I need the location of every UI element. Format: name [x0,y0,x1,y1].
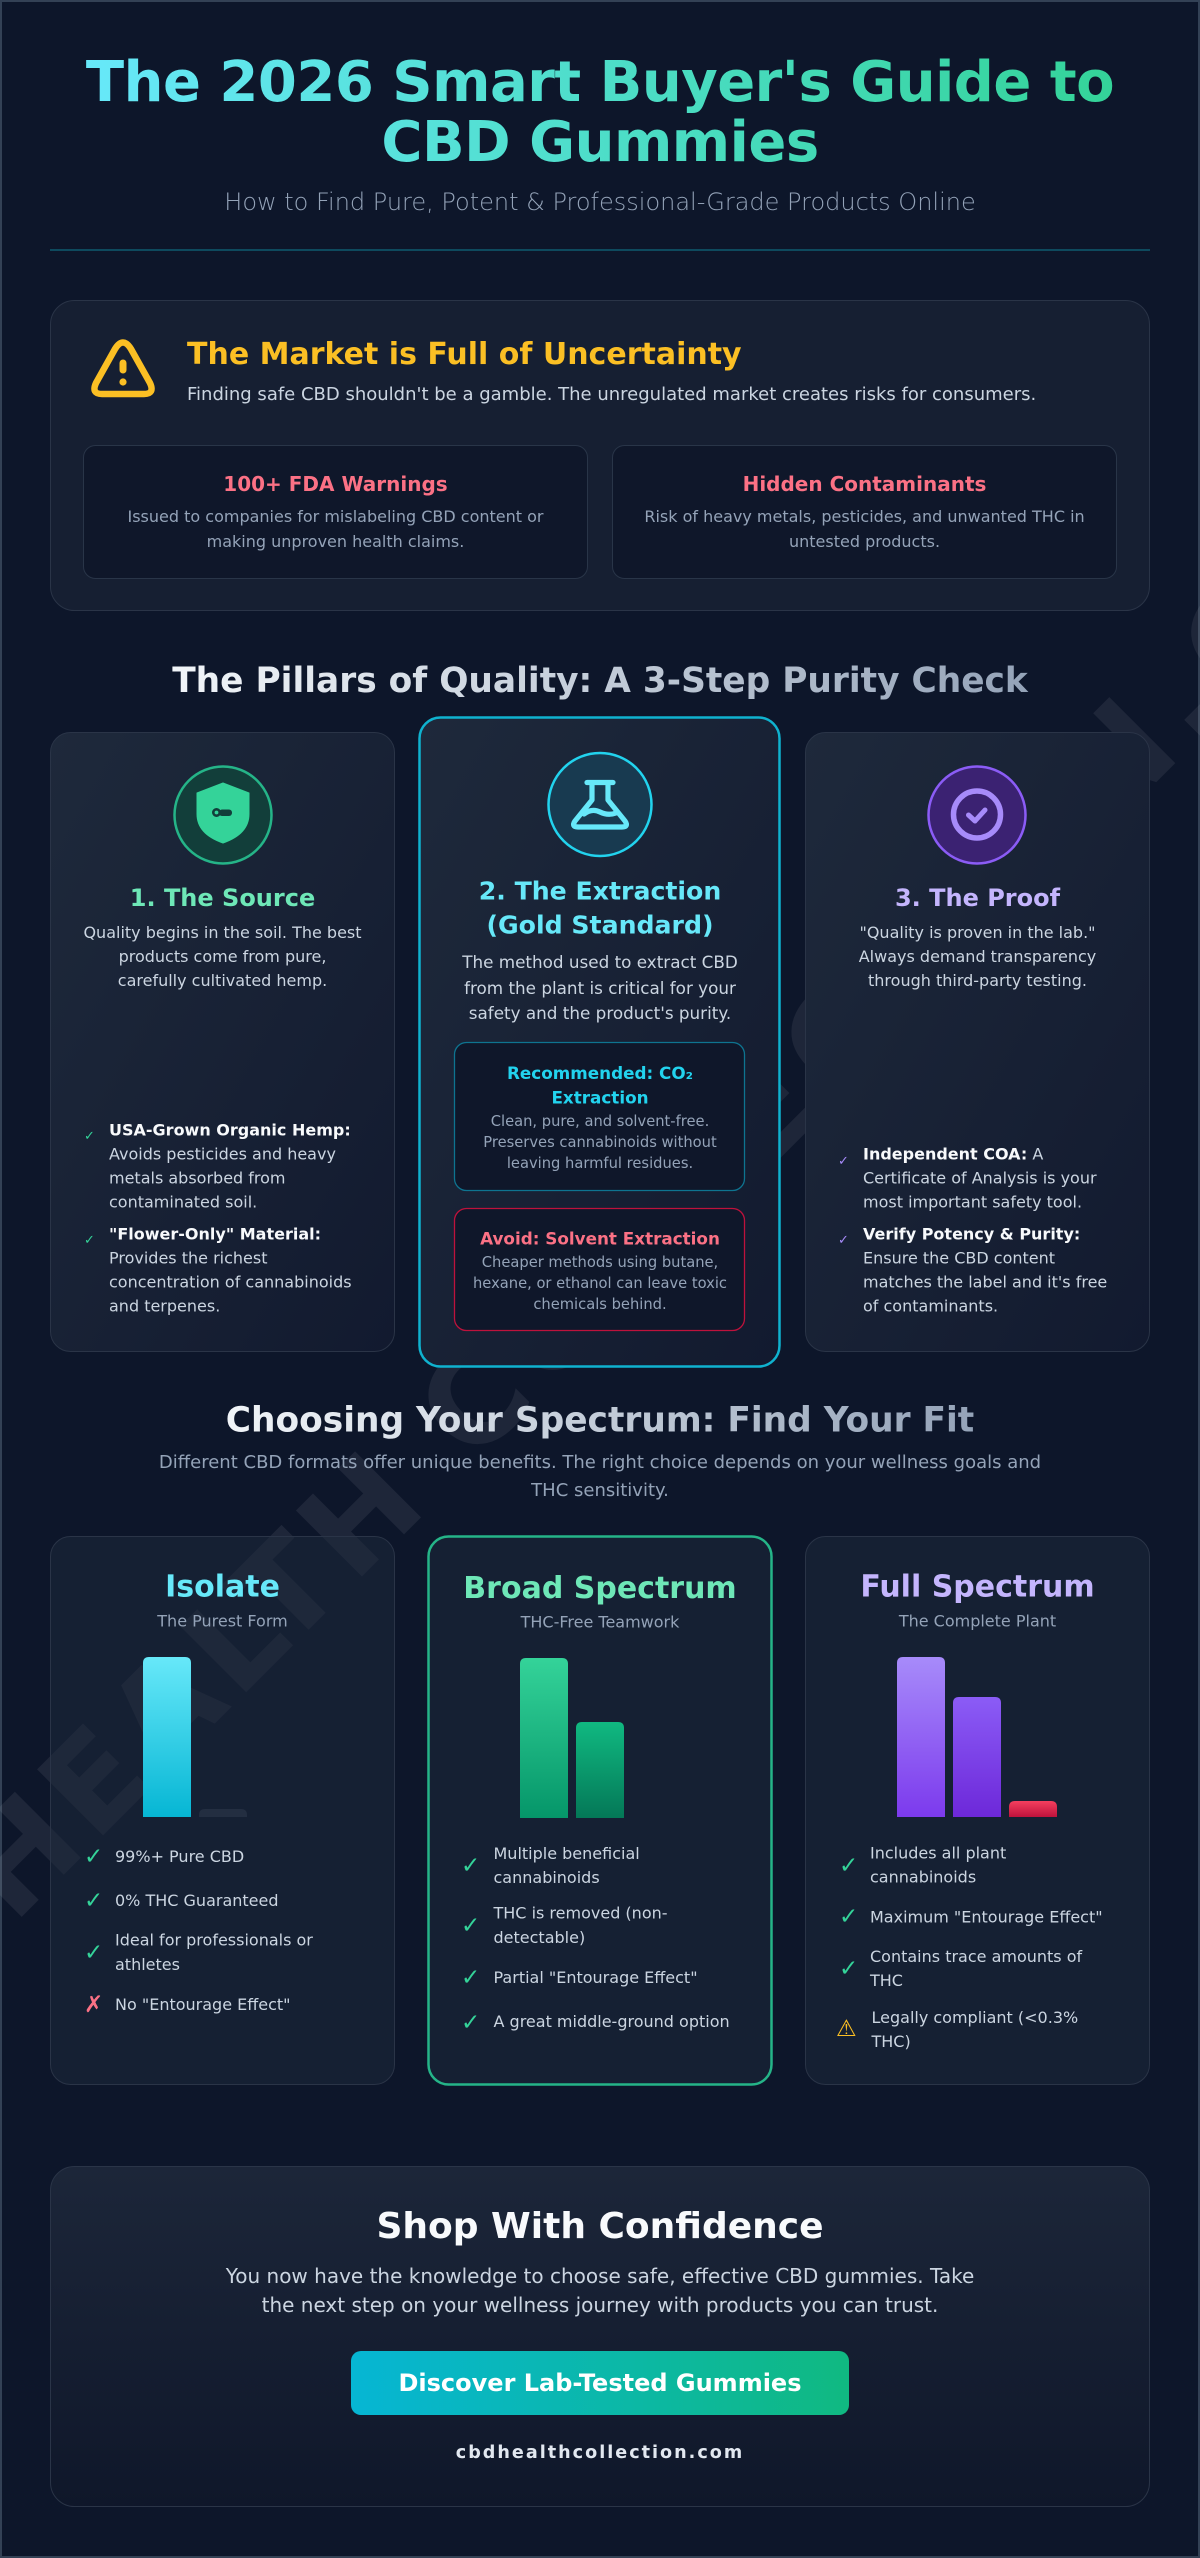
pillar 1 checklist: "Flower-Only" Material: [109,1224,321,1244]
card: hidden contaminants: Risk of heavy metals, pesticides, and unwanted THC in [644,507,1085,526]
card: hidden contaminants [612,446,1116,578]
panel: market uncertainty [50,300,1150,610]
pillar 1 description: products come from pure, [119,947,326,966]
subtitle: How to Find Pure, Potent & Professional-Grade Products Online [224,188,976,216]
panel: call to action [50,2166,1150,2506]
website URL: cbdhealthcollection.com [456,2443,744,2463]
broad spectrum title: Broad Spectrum [463,1571,737,1606]
callout: avoid solvent [454,1208,744,1330]
panel: full spectrum [806,1536,1150,2084]
isolate title: Isolate [165,1570,280,1604]
broad spectrum checklist [461,1844,730,2036]
callout: recommended CO2: leaving harmful residues. [507,1155,693,1172]
pillar 3 checklist: ✓ [838,1233,849,1248]
full spectrum checklist: ✓ [839,1956,858,1982]
callout: avoid solvent: Cheaper methods using butane, [482,1254,718,1271]
pillar 1 checklist: ✓ [84,1129,95,1144]
pillar 1 checklist: ✓ [84,1233,95,1248]
bar chart: isolate [143,1657,247,1817]
isolate checklist: No "Entourage Effect" [115,1995,291,2014]
broad spectrum checklist: THC is removed (non- [492,1904,668,1922]
card: FDA warnings: making unproven health claims. [207,532,464,551]
isolate checklist: 0% THC Guaranteed [115,1891,279,1910]
icon: shield [174,766,272,864]
pillar 1 checklist: and terpenes. [109,1296,220,1316]
broad spectrum checklist: Partial "Entourage Effect" [494,1968,698,1987]
full spectrum checklist: Maximum "Entourage Effect" [870,1908,1103,1926]
CTA text [225,2264,974,2317]
pillar 3 description [859,923,1096,990]
pillar 3 checklist: ✓ [838,1154,849,1169]
section intro text: Different CBD formats offer unique benefits. The right choice depends on your wellness goals and [159,1452,1041,1473]
icon: warning triangle [94,342,152,394]
CTA button: Discover Lab-Tested Gummies [399,2369,801,2397]
broad spectrum checklist: ✓ [461,1853,480,1879]
broad spectrum checklist: A great middle-ground option [494,2012,730,2031]
callout: avoid solvent: hexane, or ethanol can leave toxic [473,1275,727,1292]
broad spectrum checklist: ✓ [461,2010,480,2036]
full spectrum checklist: Includes all plant [870,1844,1006,1862]
isolate checklist: ✗ [84,1992,103,2018]
pillar 1 description: carefully cultivated hemp. [118,971,327,990]
broad spectrum checklist: ✓ [461,1913,480,1939]
pillar 3 description: through third-party testing. [868,971,1087,990]
card: FDA warnings [84,446,588,578]
isolate checklist [84,1844,313,2018]
pillar 3 checklist [838,1144,1107,1316]
pillar 3 checklist: Ensure the CBD content [863,1248,1055,1268]
full spectrum checklist: ✓ [839,1853,858,1879]
pillar 1 checklist: contaminated soil. [109,1192,257,1212]
pillar 2 title: 2. The Extraction [479,876,721,906]
full spectrum checklist: Legally compliant (<0.3% [872,2008,1078,2027]
callout: avoid solvent: Avoid: Solvent Extraction [480,1228,720,1248]
full spectrum checklist: THC [869,1971,903,1990]
CTA heading: Shop With Confidence [376,2206,824,2247]
pillar 3 title: 3. The Proof [895,884,1061,912]
pillar 3 checklist: Certificate of Analysis is your [863,1168,1097,1188]
broad spectrum checklist: ✓ [461,1965,480,1991]
card: FDA warnings: Issued to companies for mislabeling CBD content or [128,507,544,526]
CTA text: You now have the knowledge to choose safe, effective CBD gummies. Take [225,2264,974,2288]
broad spectrum subtitle: THC-Free Teamwork [520,1612,680,1632]
isolate checklist: ✓ [84,1888,103,1914]
title: CBD Gummies [381,110,819,175]
callout: recommended CO2: Preserves cannabinoids without [483,1134,717,1151]
pillar 1 title: 1. The Source [130,884,315,912]
isolate checklist: ✓ [84,1940,103,1966]
full spectrum checklist [836,1844,1103,2051]
pillar 1 checklist: USA-Grown Organic Hemp: [109,1120,351,1140]
panel: pillar 3 the proof [806,732,1150,1352]
pillar 1 checklist [84,1120,352,1316]
pillar 1 checklist: Avoids pesticides and heavy [109,1144,336,1164]
pillar 1 description [83,923,362,990]
market heading: The Market is Full of Uncertainty [187,337,742,372]
full spectrum title: Full Spectrum [860,1570,1095,1604]
broad spectrum checklist: cannabinoids [494,1868,600,1887]
pillar 3 checklist: matches the label and it's free [863,1272,1107,1292]
title: The 2026 Smart Buyer's Guide to [86,50,1114,115]
panel: pillar 2 the extraction [420,718,780,1366]
bar chart: broad spectrum [520,1658,624,1818]
pillar 3 checklist: Independent COA: A [863,1144,1043,1164]
pillar 3 checklist: Verify Potency & Purity: [863,1224,1080,1244]
pillar 2 title: (Gold Standard) [486,910,714,940]
pillar 2 title [479,876,721,940]
broad spectrum checklist: detectable) [494,1928,585,1947]
CTA text: the next step on your wellness journey with products you can trust. [262,2293,938,2317]
broad spectrum checklist: Multiple beneficial [494,1844,640,1863]
card: FDA warnings: 100+ FDA Warnings [223,472,448,496]
icon: check badge [928,766,1026,864]
pillar 2 description: The method used to extract CBD [461,952,738,972]
full spectrum checklist: ⚠ [836,2016,857,2042]
pillar 3 checklist: most important safety tool. [863,1192,1082,1212]
pillar 1 checklist: metals absorbed from [109,1168,286,1188]
full spectrum checklist: ✓ [839,1904,858,1930]
callout: recommended CO2: Recommended: CO₂ [507,1063,693,1083]
full spectrum checklist: THC) [870,2032,911,2051]
pillar 1 checklist: concentration of cannabinoids [109,1272,352,1292]
full spectrum subtitle: The Complete Plant [898,1612,1056,1630]
callout: recommended CO2: Clean, pure, and solvent-free. [491,1113,709,1130]
heading: pillars of quality: The Pillars of Quality: A 3-Step Purity Check [172,661,1029,701]
full spectrum checklist: Contains trace amounts of [870,1947,1083,1966]
callout: recommended CO2: Extraction [551,1088,649,1108]
pillar 3 checklist: of contaminants. [863,1296,998,1316]
card: hidden contaminants: Hidden Contaminants [743,472,986,496]
panel: isolate [50,1536,394,2084]
isolate subtitle: The Purest Form [156,1612,288,1630]
isolate checklist: ✓ [84,1844,103,1870]
pillar 1 description: Quality begins in the soil. The best [83,923,362,942]
panel: pillar 1 the source [50,732,394,1352]
card: hidden contaminants: untested products. [789,532,940,551]
panel: broad spectrum [428,1536,772,2084]
pillar 3 description: Always demand transparency [859,947,1096,966]
heading: choosing your spectrum: Choosing Your Spectrum: Find Your Fit [226,1400,974,1440]
CTA button [351,2351,849,2415]
pillar 2 description: safety and the product's purity. [469,1003,731,1023]
section intro text: THC sensitivity. [530,1480,669,1501]
market intro text: Finding safe CBD shouldn't be a gamble. The unregulated market creates risks for consumers. [187,384,1036,405]
icon: flask [548,753,652,856]
isolate checklist: Ideal for professionals or [115,1930,313,1950]
callout: avoid solvent: chemicals behind. [533,1296,667,1313]
full spectrum checklist: cannabinoids [870,1868,976,1886]
bar chart: full spectrum [897,1657,1057,1817]
callout: recommended CO2 [454,1042,744,1190]
pillar 1 checklist: Provides the richest [109,1248,267,1268]
pillar 2 description [461,952,738,1023]
title [86,50,1114,175]
isolate checklist: 99%+ Pure CBD [115,1847,244,1866]
isolate checklist: athletes [115,1955,180,1974]
pillar 3 description: "Quality is proven in the lab." [859,923,1096,942]
section intro text [159,1452,1041,1501]
pillar 2 description: from the plant is critical for your [464,978,736,998]
